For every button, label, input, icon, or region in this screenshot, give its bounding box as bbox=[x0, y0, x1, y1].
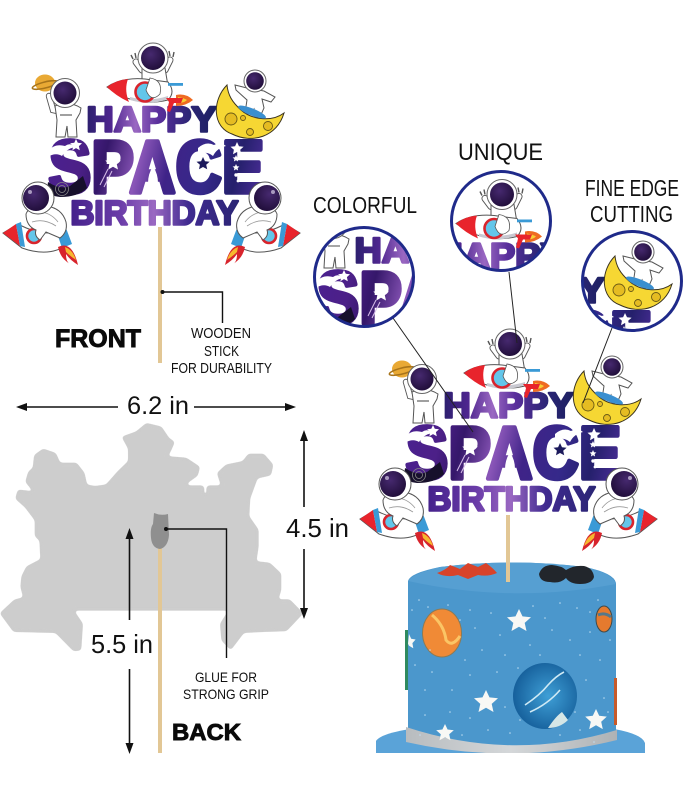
heading: front: FRONT bbox=[55, 325, 141, 353]
magnifier: fine edge cutting bbox=[581, 230, 683, 332]
width dimension: 6.2 in: 6.2 in bbox=[127, 392, 189, 420]
stick dimension: 5.5 in bbox=[91, 528, 153, 754]
width dimension: 6.2 in bbox=[16, 392, 296, 420]
cake topper: HAPPY bbox=[444, 386, 574, 426]
black boots bbox=[539, 565, 594, 584]
callout: glue: GLUE FOR bbox=[195, 669, 257, 685]
label: fine edge cutting bbox=[585, 175, 679, 227]
glue blob bbox=[151, 513, 169, 549]
callout: wooden stick: FOR DURABILITY bbox=[171, 360, 272, 377]
front topper bbox=[3, 43, 300, 265]
sprinkles bbox=[412, 600, 610, 742]
callout: wooden stick bbox=[160, 290, 272, 377]
cake tier bbox=[408, 562, 616, 746]
stars bbox=[408, 609, 607, 740]
callout: glue: STRONG GRIP bbox=[183, 686, 269, 702]
cake bbox=[376, 562, 645, 754]
wooden stick: back bbox=[158, 533, 162, 753]
cake topper bbox=[360, 329, 657, 551]
magnifier: unique bbox=[450, 170, 552, 272]
callout: glue bbox=[164, 527, 269, 702]
label: colorful: COLORFUL bbox=[313, 192, 417, 218]
height dimension: 4.5 in bbox=[286, 430, 349, 619]
callout: wooden stick: STICK bbox=[204, 343, 239, 360]
wooden stick: cake topper bbox=[506, 515, 510, 582]
small planet bbox=[596, 606, 612, 632]
cake topper: BIRTHDAY bbox=[428, 481, 596, 519]
heading: back: BACK bbox=[172, 719, 241, 745]
orange planet bbox=[422, 609, 462, 657]
wooden stick: front bbox=[158, 227, 162, 363]
label: unique: UNIQUE bbox=[458, 139, 543, 166]
cake topper: SPACE bbox=[406, 412, 622, 494]
magnifier: colorful bbox=[313, 226, 415, 328]
silver ribbon bbox=[406, 727, 617, 754]
callout: wooden stick: WOODEN bbox=[191, 325, 251, 342]
back silhouette bbox=[1, 424, 302, 650]
cake top surface bbox=[408, 562, 616, 593]
leader lines bbox=[393, 272, 612, 432]
red decoration bbox=[437, 563, 497, 579]
height dimension: 4.5 in: 4.5 in bbox=[286, 513, 349, 543]
blue planet bbox=[513, 663, 577, 729]
side decorations bbox=[405, 630, 617, 725]
stick dimension: 5.5 in: 5.5 in bbox=[91, 629, 153, 659]
cake board bbox=[376, 729, 645, 753]
